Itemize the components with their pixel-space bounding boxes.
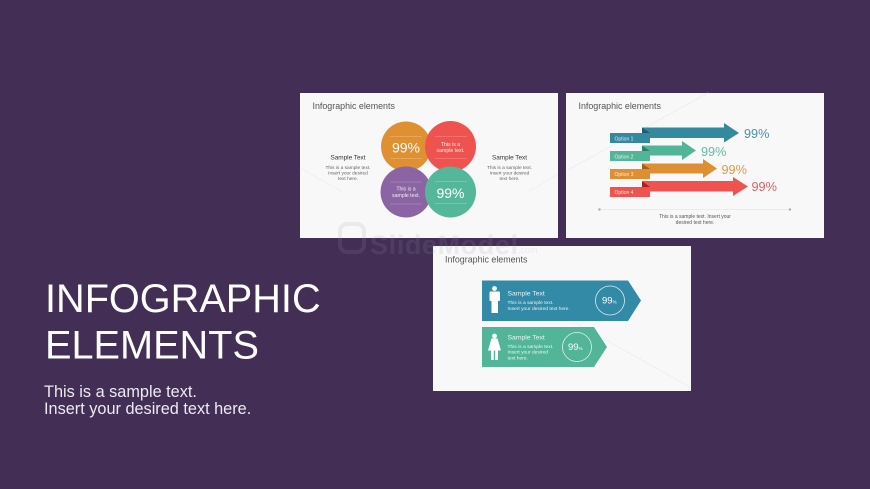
icon: woman: [488, 334, 501, 360]
arrow: option 2: [610, 141, 726, 161]
banner: female: Insert your desired: [508, 350, 548, 356]
arrow: option 2: 99%: [701, 145, 726, 159]
arrow: option 3: Option 3: [614, 172, 634, 178]
banner: female: This is a sample text.: [508, 344, 553, 350]
circle: orange: 99%: [392, 140, 420, 156]
title: ELEMENTS: [45, 324, 259, 368]
arrow: option 2: Option 2: [614, 154, 634, 160]
banner: male: 99%: [602, 296, 617, 306]
circle: red: [425, 121, 476, 172]
text block: right: [487, 154, 532, 182]
title: [45, 277, 321, 368]
circle: red: sample text.: [437, 148, 464, 154]
arrow: option 1: Option 1: [614, 136, 634, 142]
circle: purple: [380, 166, 432, 218]
arrow: option 4: Option 4: [614, 190, 634, 196]
circle: red: This is a: [441, 142, 460, 148]
panel: four circles slide: [300, 93, 558, 238]
title: INFOGRAPHIC: [45, 277, 321, 321]
watermark: .com: [518, 245, 538, 255]
heading: slide 2 title: Infographic elements: [578, 101, 661, 111]
banner: female: text here.: [508, 356, 528, 362]
subtitle: This is a sample text.: [44, 383, 197, 401]
banner: male: [482, 280, 641, 321]
caption: [659, 214, 731, 226]
icon: man: [490, 286, 500, 313]
banner: female: Sample Text: [508, 334, 545, 342]
heading: slide 1 title: Infographic elements: [312, 101, 395, 111]
heading: slide 3 title: Infographic elements: [445, 254, 528, 264]
circle: purple: This is a: [396, 186, 416, 192]
text block: left: This is a sample text.: [325, 165, 371, 171]
circle: green: [425, 166, 476, 218]
text block: left: text here.: [338, 176, 358, 182]
arrow: option 1: [610, 123, 769, 143]
text block: left: Insert your desired: [328, 170, 368, 176]
subtitle: Insert your desired text here.: [44, 400, 251, 418]
text block: left: Sample Text: [330, 154, 366, 162]
watermark: [340, 224, 538, 260]
subtitle: [44, 383, 251, 418]
arrow: option 3: [610, 159, 747, 179]
arrow: option 3: 99%: [722, 163, 747, 177]
caption: This is a sample text. Insert your: [659, 214, 731, 220]
text block: right: Insert your desired: [490, 170, 530, 176]
text block: right: text here.: [500, 176, 520, 182]
circle: orange: [381, 122, 431, 172]
arrow: option 4: [610, 177, 777, 197]
banner: female: 99%: [568, 342, 583, 353]
arrow: option 4: 99%: [752, 180, 777, 194]
caption: desired text here.: [676, 220, 714, 226]
circle: purple: sample text.: [392, 193, 420, 199]
divider with end dots: [598, 208, 791, 211]
text block: left: [325, 154, 371, 182]
watermark: SlideModel: [370, 230, 518, 260]
panel: people slide: [433, 246, 691, 391]
banner: male: This is a sample text.: [508, 300, 553, 306]
arrow: option 1: 99%: [744, 127, 769, 141]
panel: arrows slide: [566, 93, 824, 238]
banner: female: [482, 327, 607, 367]
text block: right: Sample Text: [492, 154, 527, 162]
banner: male: Sample Text: [508, 290, 545, 298]
text block: right: This is a sample text.: [487, 165, 532, 171]
circle: green: 99%: [436, 185, 465, 201]
banner: male: Insert your desired text here.: [508, 306, 570, 312]
